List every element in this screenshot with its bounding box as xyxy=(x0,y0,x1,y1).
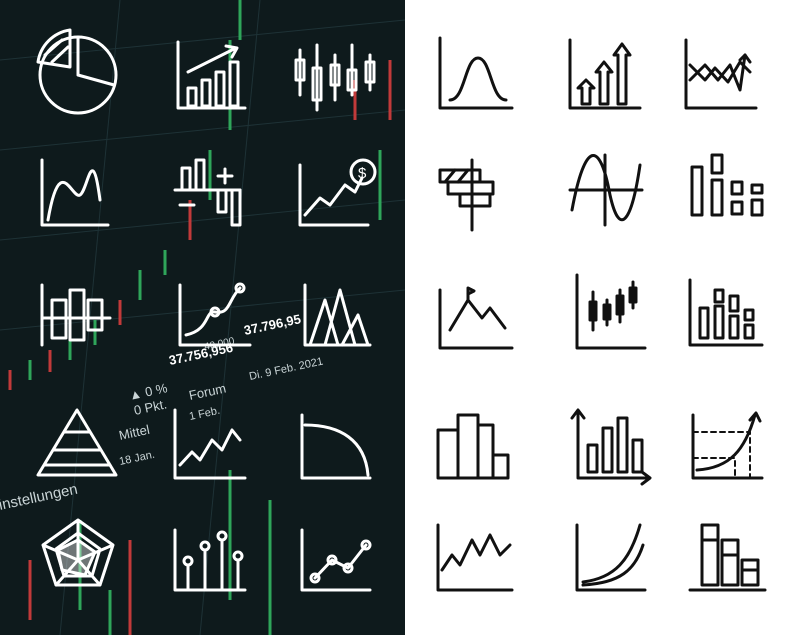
panel: dark trading background: 18 Jan. xyxy=(118,449,156,468)
icon: dot line chart xyxy=(302,530,370,590)
panel: dark trading background: Di. 9 Feb. 2021 xyxy=(248,356,324,383)
icon: decay curve xyxy=(302,415,370,478)
icon: stacked bars xyxy=(690,525,765,590)
icon: candlestick xyxy=(296,45,374,110)
panel: dark trading background: Mittel xyxy=(118,422,151,443)
panel: dark trading background: 37.756,956 xyxy=(168,340,234,368)
panel: dark trading background: 40,000 xyxy=(203,336,236,353)
panel: dark trading background xyxy=(0,0,405,635)
right icons xyxy=(438,38,765,590)
icon: pyramid xyxy=(38,410,116,475)
icon: curve with points xyxy=(180,284,250,345)
icon: sine wave xyxy=(570,155,642,225)
icon: arrow bars xyxy=(570,40,640,108)
icon: exponential with dashed lines xyxy=(693,413,762,478)
icon: pie chart xyxy=(38,30,116,113)
icon: plus minus bars xyxy=(175,160,240,225)
icon: split bars 2 xyxy=(690,280,762,345)
panel: dark trading background: 1 Feb. xyxy=(188,405,221,423)
icon: floating bars xyxy=(440,160,493,230)
icon: histogram xyxy=(438,415,508,478)
icon: crossing lines xyxy=(686,40,756,108)
icon: radar chart xyxy=(43,520,113,585)
icon: exponential curves xyxy=(577,525,645,590)
panel: dark trading background: ▲ 0 % xyxy=(128,380,169,403)
icon: dollar growth: $ xyxy=(358,165,367,182)
panel: dark trading background: 37.796,95 xyxy=(243,311,302,338)
panel: dark trading background: Forum xyxy=(188,380,227,403)
icon: arrow axis bars xyxy=(572,410,650,484)
left icons xyxy=(38,30,375,590)
panel: dark trading background: 0 Pkt. xyxy=(133,396,168,418)
icon: lollipop chart xyxy=(175,530,245,590)
icon: candlestick small xyxy=(577,275,645,348)
icon: flag line xyxy=(440,288,512,348)
icon: bell curve xyxy=(440,38,512,108)
icon: double peak curve xyxy=(42,160,108,225)
icon: split bars xyxy=(692,155,762,215)
icon: bar chart with arrow xyxy=(178,42,245,108)
icon: box plot xyxy=(42,285,110,345)
icon: dollar growth xyxy=(300,160,375,225)
icon: area peaks xyxy=(305,285,370,345)
icon: line chart xyxy=(175,410,245,478)
icon: jagged line xyxy=(438,525,512,590)
